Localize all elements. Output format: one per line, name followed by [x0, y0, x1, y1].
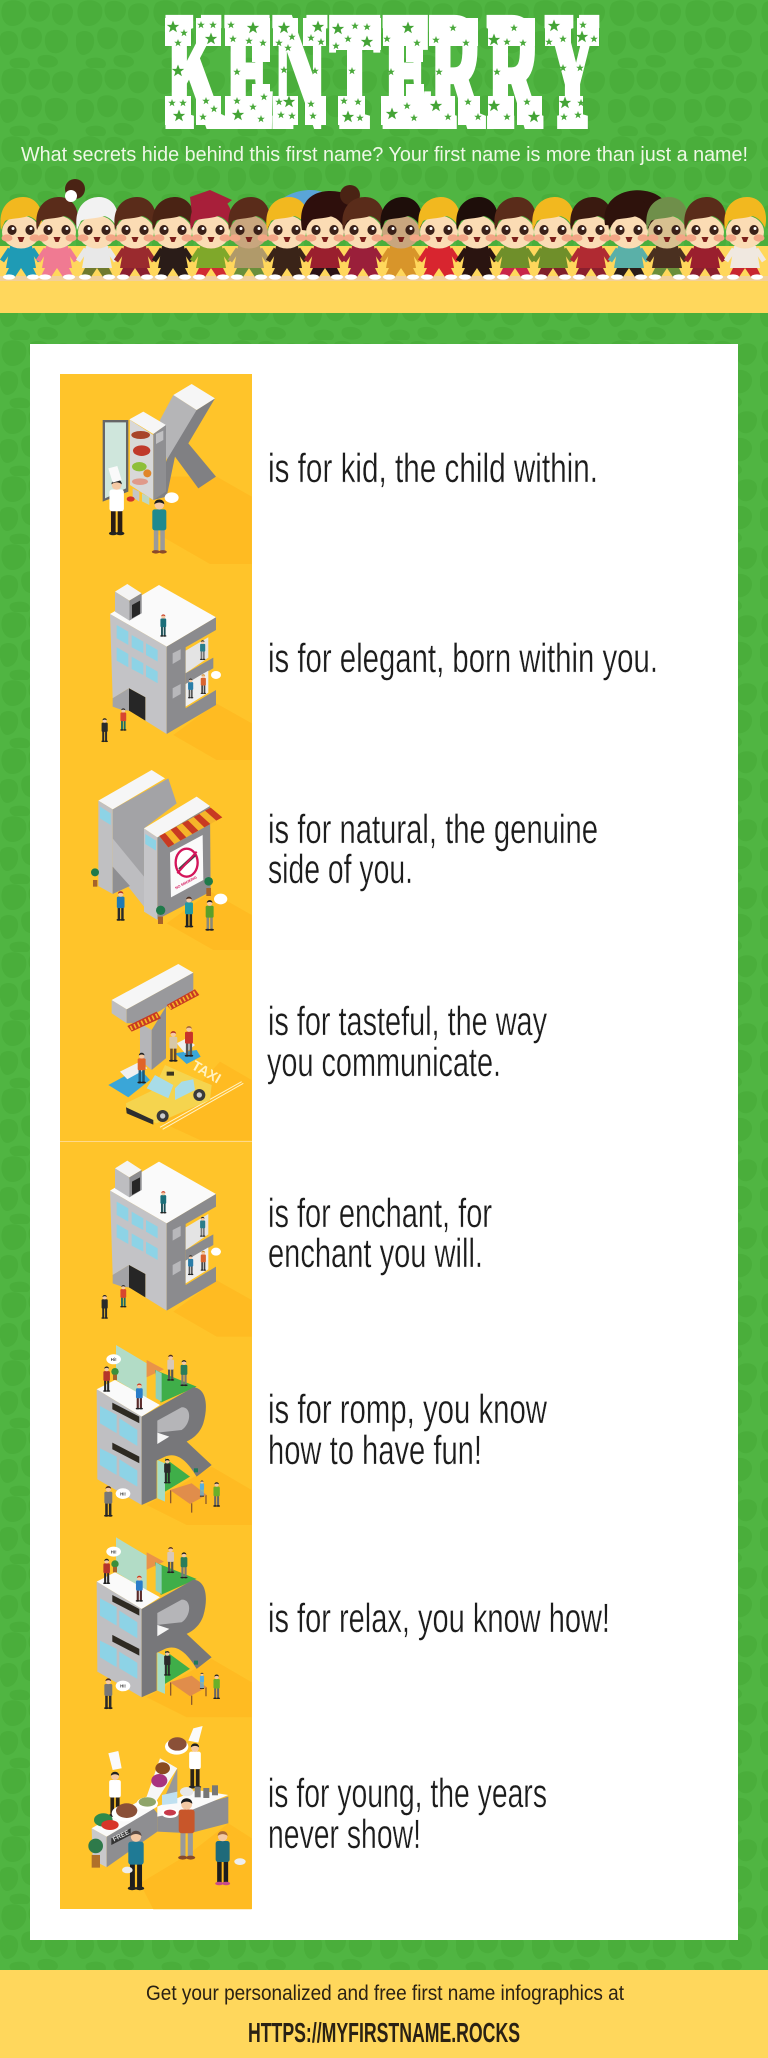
illustration: letter K with fridge and chef — [103, 384, 252, 564]
text: second E lines — [268, 1190, 492, 1276]
text: second E lines: enchant you will. — [268, 1230, 483, 1276]
illustration: letter N with awning and no smoking sign — [91, 770, 252, 950]
text: N lines: side of you. — [268, 846, 413, 892]
text: T lines: you communicate. — [267, 1039, 501, 1085]
text: T lines — [267, 998, 547, 1085]
illustration: letter R with rooftop garden — [97, 1345, 252, 1525]
text: T lines: is for tasteful, the way — [268, 998, 547, 1044]
text: R lines: is for romp, you know — [268, 1386, 547, 1432]
text: second E lines: is for enchant, for — [268, 1190, 492, 1236]
illustration: letter Y buffet with chefs — [88, 1726, 252, 1909]
text: N lines: is for natural, the genuine — [268, 806, 598, 852]
text: second R line: is for relax, you know how! — [268, 1595, 610, 1641]
text: N lines — [268, 806, 598, 892]
illustration: second letter E office building — [101, 1161, 252, 1337]
footer band — [0, 1970, 768, 2058]
row of cartoon children in national costumes — [0, 179, 766, 280]
subtitle: What secrets hide behind this first name? Your first name is more than just a name! — [21, 144, 748, 166]
text: K line: is for kid, the child within. — [268, 445, 598, 491]
text: Y lines: is for young, the years — [268, 1770, 547, 1816]
text: Y lines: never show! — [268, 1811, 421, 1857]
illustration: letter T taxi stand: TAXI — [189, 1057, 224, 1086]
footer url: HTTPS://MYFIRSTNAME.ROCKS — [248, 2017, 520, 2048]
footer call to action: Get your personalized and free first name infographics at — [146, 1982, 624, 2005]
illustration: second letter R with rooftop garden — [97, 1537, 252, 1717]
illustration: letter E office building — [101, 584, 252, 760]
white content panel — [30, 344, 738, 1940]
illustration: letter Y buffet with chefs: FREE — [112, 1829, 131, 1843]
yellow illustration column — [60, 374, 252, 1909]
yellow band behind characters — [0, 246, 768, 313]
text: R lines: how to have fun! — [268, 1427, 482, 1473]
illustration: letter T taxi stand — [108, 964, 252, 1140]
illustration: letter N with awning and no smoking sign: NO SMOKING — [175, 875, 198, 890]
text: Y lines — [268, 1770, 547, 1857]
text: R lines — [268, 1386, 547, 1473]
